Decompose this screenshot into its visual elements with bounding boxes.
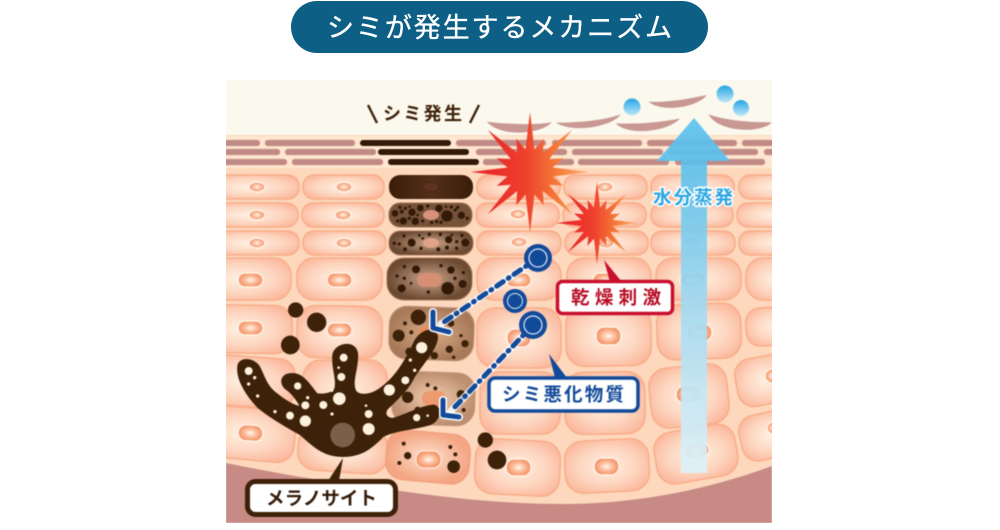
callout: melanocyte xyxy=(248,458,396,514)
icon: small burst xyxy=(556,182,638,264)
label: moisture evaporation: 水分蒸発 xyxy=(653,187,733,208)
panel: skin cross-section xyxy=(226,80,772,523)
icon: water droplets xyxy=(624,86,749,116)
skin cells xyxy=(226,174,772,498)
cell nuclei xyxy=(237,182,779,476)
melanin vesicles xyxy=(245,342,429,435)
title xyxy=(291,1,708,53)
arrow: upper dashed arrow xyxy=(433,258,538,332)
melanin granules in cells xyxy=(392,204,469,295)
spot progression cells xyxy=(384,175,476,486)
callout: dryness irritation: 乾燥刺激 xyxy=(571,287,661,308)
dermis layer xyxy=(226,463,772,523)
arrow: moisture evaporation xyxy=(657,118,730,473)
spot in stratum corneum xyxy=(360,140,479,165)
skin flakes xyxy=(487,95,772,133)
callout: aggravating substance xyxy=(489,354,638,411)
callout: melanocyte: メラノサイト xyxy=(266,488,377,509)
icon: aggravating substance particles xyxy=(503,244,552,339)
icon: large burst xyxy=(471,112,589,232)
title: シミが発生するメカニズム xyxy=(327,13,672,43)
stratum corneum layers xyxy=(200,140,804,165)
callout: aggravating substance: シミ悪化物質 xyxy=(502,384,624,405)
melanocyte xyxy=(239,302,506,473)
callout: dryness irritation xyxy=(558,260,672,314)
label: spot formation: シミ発生 xyxy=(383,104,462,124)
melanin granules around melanocyte xyxy=(281,302,506,473)
arrow: lower dashed arrow xyxy=(443,325,533,417)
